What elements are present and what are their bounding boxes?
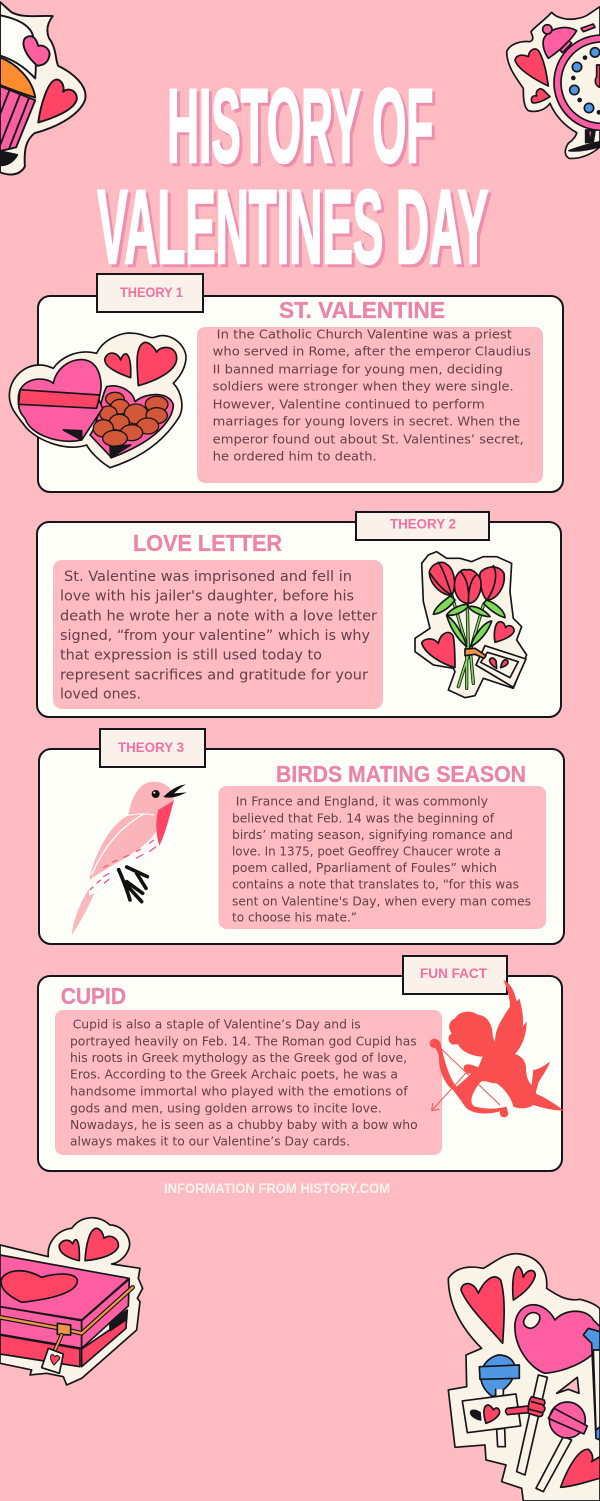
icon: cupcake sticker [0, 2, 86, 174]
text block: Love Letter: death he wrote her a note with a love letter [60, 608, 377, 624]
text block: Love Letter: loved ones. [60, 687, 141, 703]
text block: Cupid: Eros. According to the Greek Archaic poets, he was a [70, 1068, 398, 1083]
heading: St. Valentine: ST. VALENTINE [279, 297, 445, 323]
text block: Cupid: portrayed heavily on Feb. 14. The Roman god Cupid has [70, 1034, 417, 1049]
text block: Birds Mating Season: believed that Feb. 14 was the beginning of [232, 811, 494, 826]
text block: Birds Mating Season: to choose his mate.” [232, 911, 357, 926]
tag: theory 3 [100, 729, 205, 767]
text block: Birds Mating Season: contains a note that translates to, “for this was [232, 878, 519, 893]
tag: theory 2: THEORY 2 [390, 516, 456, 532]
text block: Cupid [55, 1010, 442, 1155]
text block: St. Valentine: he ordered him to death. [213, 450, 377, 465]
text block: Love Letter: love with his jailer's daughter, before his [60, 589, 354, 605]
text block: Cupid: his roots in Greek mythology as the Greek god of love, [70, 1051, 407, 1066]
text block: St. Valentine: emperor found out about St. Valentines’ secret, [213, 432, 524, 447]
panel: theory 3 Birds Mating Season [39, 729, 564, 944]
icon: gift box sticker [0, 1218, 143, 1385]
text block: Love Letter: represent sacrifices and gratitude for your [60, 667, 368, 683]
icon: heart chocolate box [9, 333, 186, 468]
title text [97, 68, 488, 286]
heading: Cupid: CUPID [61, 983, 126, 1009]
icon: tulip bouquet sticker [415, 552, 527, 698]
icon: lollipops sticker [448, 1254, 600, 1501]
icon: cupid silhouette [431, 980, 564, 1117]
text block: Love Letter: signed, “from your valentine” which is why [60, 628, 370, 644]
text block: Love Letter [53, 560, 383, 709]
text block: Cupid: Cupid is also a staple of Valentine’s Day and is [73, 1018, 361, 1033]
text block: Cupid: handsome immortal who played with the emotions of [70, 1084, 408, 1099]
tag: fun fact [403, 956, 507, 994]
icon: alarm clock sticker [507, 7, 600, 158]
text block: St. Valentine: In the Catholic Church Valentine was a priest [217, 327, 512, 342]
text block: Cupid: gods and men, using golden arrows to incite love. [70, 1101, 382, 1116]
card background [39, 749, 564, 944]
tag: theory 2 [356, 512, 489, 540]
card background [38, 296, 563, 492]
card background [38, 976, 562, 1171]
text block: St. Valentine: II banned marriage for young men, deciding [213, 362, 503, 377]
text block: Love Letter: St. Valentine was imprisoned and fell in [64, 569, 352, 585]
heading: Love Letter: LOVE LETTER [133, 530, 282, 556]
panel: theory 1 St. Valentine [9, 274, 563, 492]
title [97, 68, 491, 289]
text block: Birds Mating Season: In France and England, it was commonly [236, 795, 488, 810]
text block: St. Valentine [197, 327, 543, 483]
text block: Cupid: Nowadays, he is seen as a chubby baby with a bow who [70, 1118, 418, 1133]
text block: Cupid: always makes it to our Valentine’s Day cards. [70, 1135, 350, 1150]
panel: theory 2 Love Letter [37, 512, 561, 717]
text block: St. Valentine: However, Valentine continued to perform [213, 397, 485, 412]
tag: theory 3: THEORY 3 [118, 740, 184, 755]
text block: Birds Mating Season: birds’ mating season, signifying romance and [232, 828, 513, 843]
text block: Birds Mating Season: love. In 1375, poet Geoffrey Chaucer wrote a [232, 845, 501, 860]
text block: St. Valentine: marriages for young lovers in secret. When the [213, 415, 520, 430]
icon: bird [72, 782, 187, 935]
text block: St. Valentine: who served in Rome, after the emperor Claudius [213, 345, 531, 360]
text block: Love Letter: that expression is still used today to [60, 648, 322, 664]
tag: fun fact: FUN FACT [420, 966, 488, 981]
text block: Birds Mating Season: poem called, Pparliament of Foules” which [232, 861, 497, 876]
title shadow [100, 71, 491, 289]
panel: fun fact Cupid [38, 956, 564, 1171]
tag: theory 1 [97, 274, 203, 312]
card background [37, 522, 561, 717]
tag: theory 1: THEORY 1 [120, 285, 183, 300]
heading: Birds Mating Season: BIRDS MATING SEASON [276, 761, 526, 787]
text block: St. Valentine: soldiers were stronger when they were single. [213, 380, 514, 395]
footer source credit: INFORMATION FROM HISTORY.COM [164, 1181, 390, 1196]
text block: Birds Mating Season [218, 786, 546, 929]
text block: Birds Mating Season: sent on Valentine's Day, when every man comes [232, 894, 531, 909]
